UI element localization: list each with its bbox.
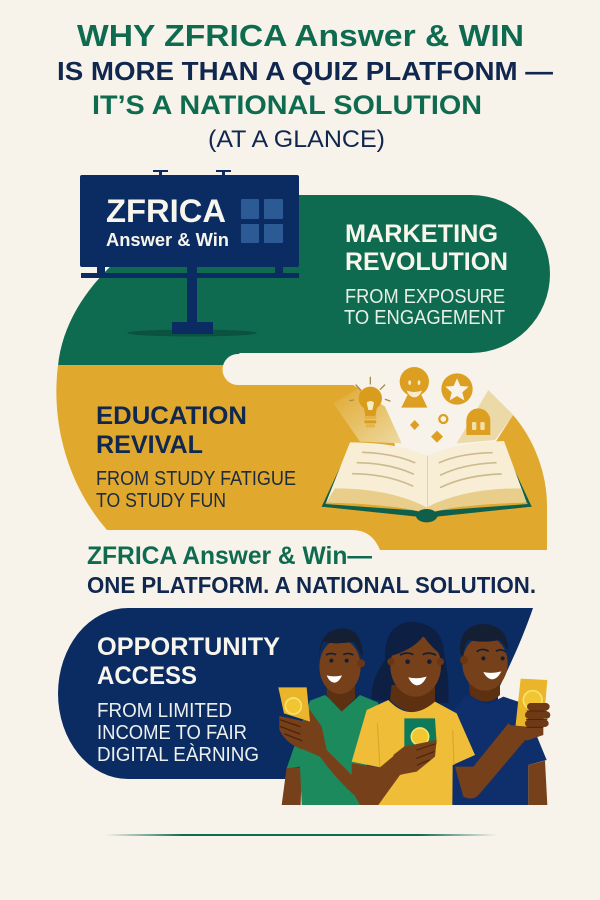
navy panel shape: [58, 608, 533, 779]
marketing heading: MARKETING: [345, 220, 498, 248]
opportunity subtext: FROM LIMITED: [97, 700, 232, 722]
footer line: [105, 834, 497, 836]
billboard squares icon: [241, 199, 283, 243]
billboard: [80, 170, 299, 336]
opportunity heading: [97, 633, 280, 690]
cream pill gap: [222, 354, 480, 385]
education subtext: TO STUDY FUN: [96, 490, 226, 512]
person: right man: [452, 624, 547, 805]
education subtext: FROM STUDY FATIGUE: [96, 468, 296, 490]
opportunity subtext: [97, 700, 259, 766]
marketing heading: REVOLUTION: [345, 248, 508, 276]
billboard board: [80, 175, 299, 267]
marketing heading: [345, 220, 508, 276]
tagline: ZFRICA Answer & Win—: [87, 542, 372, 570]
billboard logo text: Answer & Win: [106, 229, 229, 250]
panel: marketing revolution: [58, 195, 550, 366]
marketing subtext: [344, 286, 505, 329]
billboard logo text: [106, 193, 229, 250]
education heading: REVIVAL: [96, 431, 203, 459]
opportunity subtext: INCOME TO FAIR: [97, 722, 247, 744]
icon: light bulb: [350, 377, 390, 427]
education heading: EDUCATION: [96, 402, 247, 430]
billboard top lamps: [153, 170, 231, 176]
marketing subtext: TO ENGAGEMENT: [344, 307, 505, 329]
title: IS MORE THAN A QUIZ PLATFONM —: [57, 56, 553, 86]
icon: star badge: [441, 373, 473, 405]
title: (AT A GLANCE): [208, 126, 385, 153]
icon: small shapes: [410, 415, 447, 443]
yellow panel shape: [56, 365, 547, 550]
title: IT’S A NATIONAL SOLUTION: [92, 90, 482, 120]
green panel shape: [58, 195, 550, 366]
tagline: ONE PLATFORM. A NATIONAL SOLUTION.: [87, 572, 536, 598]
opportunity heading: OPPORTUNITY: [97, 633, 280, 661]
title: WHY ZFRICA Answer & WIN: [77, 18, 524, 53]
education heading: [96, 402, 247, 459]
panel: opportunity access: [58, 608, 547, 805]
illustration: three people with phones: [278, 622, 547, 805]
panel: education revival: [56, 354, 547, 550]
education subtext: [96, 468, 296, 512]
icon: smiling face: [400, 367, 429, 408]
book: [322, 441, 532, 522]
opportunity subtext: DIGITAL EÀRNING: [97, 743, 259, 766]
billboard logo text: ZFRICA: [106, 193, 226, 229]
tagline: [87, 542, 536, 598]
illustration: open book with icons: [322, 367, 532, 522]
icon: dome badge: [466, 408, 490, 435]
title: [57, 18, 553, 153]
billboard stand: [81, 266, 299, 336]
person: left man: [278, 628, 378, 805]
person: center woman: [352, 622, 475, 805]
opportunity heading: ACCESS: [97, 662, 197, 690]
marketing subtext: FROM EXPOSURE: [345, 286, 505, 308]
light beams: [333, 388, 513, 443]
